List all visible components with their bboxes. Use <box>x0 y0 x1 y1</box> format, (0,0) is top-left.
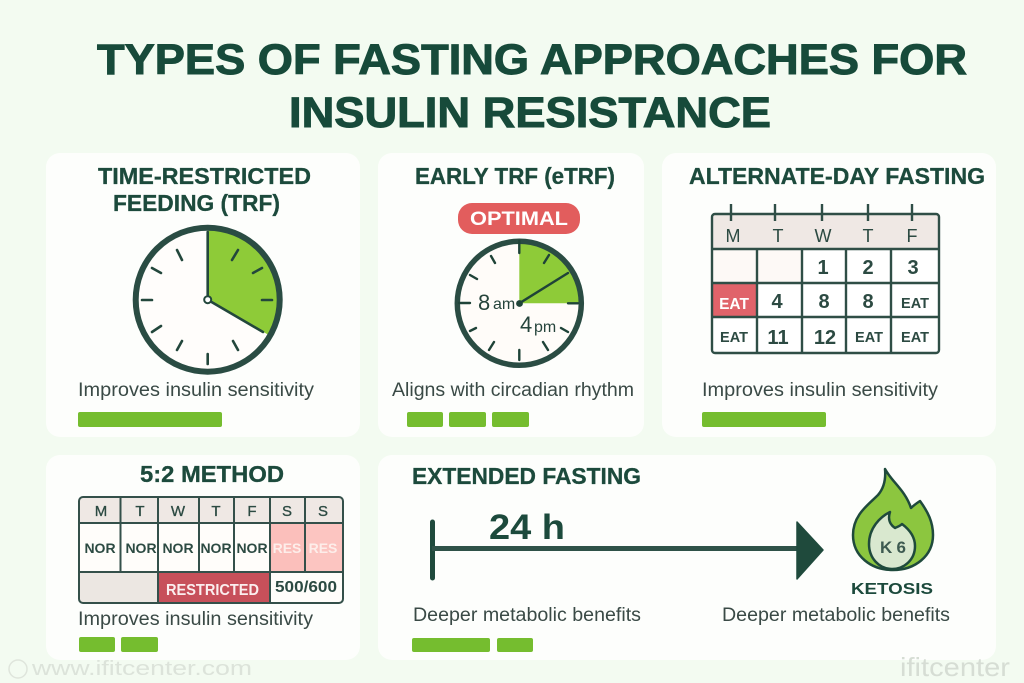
watermark: website <box>9 658 252 680</box>
calendar: weekly 5:2 table: S <box>318 503 328 520</box>
calendar: alternate days: 1 <box>817 257 829 279</box>
icon: clock 8 am to 4 pm: 4 <box>520 312 532 337</box>
calendar: alternate days: EAT <box>901 330 929 346</box>
calendar: weekly 5:2 table: NOR <box>236 540 268 556</box>
calendar: alternate days: EAT <box>720 330 748 346</box>
heading: 5:2: 5:2 METHOD <box>140 461 284 487</box>
calendar: weekly 5:2 table: NOR <box>162 540 194 556</box>
calendar: weekly 5:2 table: S <box>282 503 292 520</box>
calendar: alternate days: EAT <box>901 296 929 312</box>
heading: TRF: TIME-RESTRICTED <box>98 163 311 189</box>
panel: 5:2 method <box>46 455 360 660</box>
calendar: alternate days: 3 <box>907 257 919 279</box>
heading: ADF: ALTERNATE-DAY FASTING <box>689 163 985 189</box>
panel: extended fasting <box>378 455 996 660</box>
calendar: weekly 5:2 table: 500/600 <box>275 579 337 596</box>
icon: clock with 4/12 shaded <box>136 228 280 372</box>
icon: ketosis flame <box>853 469 933 570</box>
label: 24 h: 24 h <box>489 508 565 547</box>
calendar: alternate days: EAT <box>855 330 883 346</box>
calendar: weekly 5:2 table: RESTRICTED <box>166 582 259 599</box>
calendar: weekly 5:2 table: W <box>171 503 186 520</box>
calendar: alternate days: F <box>906 226 918 246</box>
heading: TRF <box>98 163 311 216</box>
title: INSULIN RESISTANCE <box>289 89 771 137</box>
icon: ketosis flame: K6 <box>880 538 906 557</box>
text: eTRF benefit: Aligns with circadian rhythm <box>392 380 634 401</box>
calendar: weekly 5:2 table: NOR <box>125 540 157 556</box>
calendar: weekly 5:2 table: NOR <box>200 540 232 556</box>
calendar: alternate days: EAT <box>719 296 749 313</box>
badge: optimal <box>458 203 580 234</box>
calendar: alternate days: T <box>772 226 784 246</box>
arrow: fasting timeline <box>432 522 823 579</box>
calendar: weekly 5:2 table: T <box>211 503 221 520</box>
calendar: weekly 5:2 table: T <box>135 503 145 520</box>
calendar: alternate days: 2 <box>862 257 874 279</box>
bars: 5:2 rating <box>79 637 158 652</box>
calendar: alternate days: M <box>726 226 740 246</box>
text: 5:2 benefit: Improves insulin sensitivity <box>78 609 314 630</box>
watermark: website: www.ifitcenter.com <box>31 658 252 680</box>
calendar: weekly 5:2 table: F <box>247 503 257 520</box>
calendar: weekly 5:2 table: NOR <box>84 540 116 556</box>
calendar: weekly 5:2 table: RES <box>309 540 337 556</box>
label: ketosis: KETOSIS <box>851 581 933 598</box>
calendar: alternate days: W <box>814 226 832 246</box>
calendar: weekly 5:2 table <box>79 497 343 603</box>
calendar: alternate days: 11 <box>767 327 789 349</box>
panel: time-restricted feeding <box>46 153 360 437</box>
watermark: logo: ifitcenter <box>900 652 1010 682</box>
calendar: alternate days: 12 <box>814 327 836 349</box>
badge: optimal: OPTIMAL <box>470 209 568 230</box>
heading: TRF: FEEDING (TRF) <box>113 190 280 216</box>
heading: eTRF: EARLY TRF (eTRF) <box>415 163 615 189</box>
calendar: alternate days: 8 <box>818 291 830 313</box>
calendar: alternate days: 8 <box>862 291 874 313</box>
icon: clock 8 am to 4 pm: am <box>493 296 515 313</box>
heading: extended fasting: EXTENDED FASTING <box>412 463 641 489</box>
bar: TRF rating <box>78 412 222 427</box>
text: benefit left: Deeper metabolic benefits <box>413 605 641 626</box>
calendar: alternate days <box>712 204 939 353</box>
title <box>97 36 967 137</box>
icon: clock 8 am to 4 pm <box>457 241 581 365</box>
icon: clock 8 am to 4 pm: 8 <box>478 290 490 315</box>
title: TYPES OF FASTING APPROACHES FOR <box>97 36 967 84</box>
bars: eTRF rating <box>407 412 529 427</box>
text: benefit right: Deeper metabolic benefits <box>722 605 950 626</box>
text: TRF benefit: Improves insulin sensitivity <box>78 380 315 401</box>
panel: early TRF <box>378 153 644 437</box>
calendar: alternate days: 4 <box>771 291 783 313</box>
bars: extended rating <box>412 638 533 652</box>
calendar: weekly 5:2 table: RES <box>273 540 301 556</box>
calendar: alternate days: T <box>862 226 874 246</box>
calendar: weekly 5:2 table: M <box>95 503 107 520</box>
icon: clock 8 am to 4 pm: pm <box>534 319 556 336</box>
bar: ADF rating <box>702 412 826 427</box>
panel: alternate-day fasting <box>662 153 996 437</box>
text: ADF benefit: Improves insulin sensitivity <box>702 380 939 401</box>
